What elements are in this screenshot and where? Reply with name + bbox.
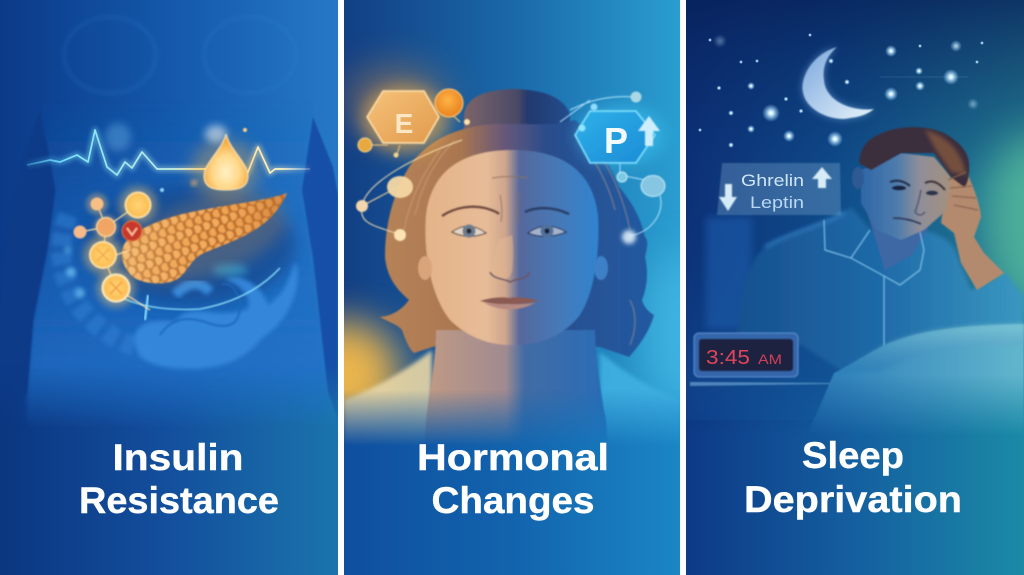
icon: orange molecule [356,89,470,241]
hair crown [463,88,570,130]
glow line [118,268,280,309]
molecule receptor network [74,186,157,310]
heading: Insulin Resistance: Resistance [79,480,279,521]
shoulders [344,350,432,450]
face [425,150,598,345]
alarm clock: AM [758,351,782,367]
icon: progesterone hexagon [575,105,664,165]
man: hand and forearm [941,173,1004,290]
man: pajama collar [824,220,924,360]
neck [424,330,608,450]
panel: sleep deprivation [686,0,1024,575]
man: facial features [890,181,945,224]
man: ear [852,167,864,189]
headboard [706,217,752,329]
intestines [61,215,298,369]
waist shadow left [25,121,55,392]
icon: insulin droplet [204,134,248,190]
bedside shelf [690,382,830,386]
pancreas [119,188,292,290]
heading: Insulin Resistance [81,442,278,514]
man: fingers on head [948,172,978,210]
icon: estrogen hexagon [361,86,449,154]
man: pajama highlights [765,212,845,247]
icon: blue molecules [578,92,665,244]
man: pajama body [737,207,1024,372]
heading: Sleep Deprivation [744,435,962,520]
hormone label: ghrelin and leptin [717,163,841,215]
heading: Insulin Resistance: Insulin [112,437,244,478]
icon: estrogen hexagon: E [395,108,413,139]
hormone label: ghrelin and leptin: Ghrelin [741,171,804,190]
heading: Sleep Deprivation: Deprivation [744,479,962,520]
ecg pulse line [27,130,310,175]
blanket [805,324,1024,440]
stars [698,33,984,148]
panel: hormonal changes [344,0,680,575]
hormone label: ghrelin and leptin: Leptin [750,193,804,212]
icon: progesterone hexagon: P [604,120,628,161]
facial features [442,176,569,310]
panel bottom fade [686,375,1024,575]
alarm clock: 3:45 [706,347,750,369]
heading: Sleep Deprivation: Sleep [802,435,904,476]
panel bottom fade [0,365,338,575]
hair [380,120,654,357]
alarm clock [694,333,798,377]
heading: Hormonal Changes: Hormonal [417,437,609,478]
heading: Hormonal Changes: Changes [432,480,594,521]
man: neck [868,215,930,270]
abdominal cavity shadow [85,185,295,305]
orbit lines [361,97,661,236]
hair strands [402,135,635,345]
man: face [861,153,951,240]
heading: Hormonal Changes [417,437,609,521]
icon: crescent moon [802,47,874,119]
panel bottom fade [344,390,680,575]
glows near drop [105,123,131,151]
torso [26,146,294,419]
waist shadow right [302,117,338,420]
man: hair [859,127,969,187]
warm glow left [290,320,400,430]
panel: insulin resistance [0,0,338,575]
